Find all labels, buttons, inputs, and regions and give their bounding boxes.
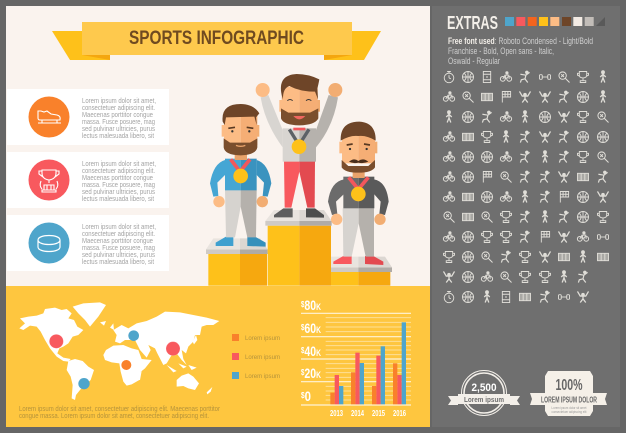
- chart axis labels: 40: [304, 343, 316, 359]
- chart axis labels: 2016: [393, 409, 406, 418]
- font credits: Franchise - Bold, Open sans - Italic,: [448, 46, 554, 57]
- chart axis labels: 80: [304, 297, 316, 313]
- text block: lectus malesuada libero, sit: [82, 194, 154, 203]
- panel: extras sidebar: [432, 6, 620, 427]
- athlete: centre in red: [256, 74, 342, 218]
- chart axis labels: K: [316, 348, 321, 358]
- text block: consectetuer adipiscing elit.: [82, 229, 155, 238]
- extras heading: EXTRAS: [447, 13, 498, 33]
- chart axis labels: 20: [304, 365, 316, 381]
- chart axis labels: $: [301, 346, 305, 355]
- illustration: podium and athletes: [206, 74, 392, 286]
- text block: massa. Fusce posuere, mag: [82, 117, 155, 126]
- colour swatches: [505, 17, 605, 26]
- chart axis labels: 2015: [372, 409, 385, 418]
- bars: [330, 322, 406, 404]
- chart legend: Lorem ipsum: [245, 354, 280, 361]
- title: SPORTS INFOGRAPHIC: [129, 28, 304, 49]
- grid lines: [301, 313, 411, 405]
- badge: 100%: [530, 371, 607, 416]
- panel: main cream poster: [6, 6, 430, 427]
- chart axis labels: K: [316, 302, 321, 312]
- chart axis labels: $: [301, 300, 305, 309]
- chart axis labels: $: [301, 323, 305, 332]
- world map: [19, 302, 219, 400]
- map markers: [49, 330, 180, 389]
- text block: massa. Fusce posuere, mag: [82, 180, 155, 189]
- chart axis labels: [301, 297, 406, 418]
- chart axis labels: $: [301, 368, 305, 377]
- icon: hockey puck: [28, 222, 70, 264]
- chart axis labels: $: [301, 391, 305, 400]
- badge: 2,500: 2,500: [472, 382, 496, 394]
- text block: lectus malesuada libero, sit: [82, 131, 154, 140]
- badge: 100%: 100%: [556, 377, 582, 394]
- panel: card 1 shoe: [7, 89, 169, 145]
- icon grid: sports icons: [443, 71, 609, 303]
- chart axis labels: 0: [305, 388, 311, 404]
- text block: massa. Fusce posuere, mag: [82, 243, 155, 252]
- icon: shoe: [28, 96, 70, 138]
- chart axis labels: 2013: [330, 409, 343, 418]
- text block: consectetuer adipiscing elit.: [82, 166, 155, 175]
- text block: sed pulvinar ultricies, purus: [82, 124, 155, 133]
- text block: lectus malesuada libero, sit: [82, 257, 154, 266]
- map caption: Lorem ipsum dolor sit amet, consectetuer adipiscing elit. Maecenas porttitor: [19, 406, 221, 413]
- athlete: right in grey: [328, 122, 389, 265]
- panel: yellow lower section: [6, 286, 430, 427]
- text block: consectetuer adipiscing elit.: [82, 103, 155, 112]
- text block: [82, 222, 156, 266]
- title ribbon: [52, 22, 381, 60]
- podium: [206, 210, 392, 286]
- badge: 2,500: Lorem ipsum: [464, 397, 504, 404]
- chart legend: [232, 334, 280, 380]
- text block: Maecenas porttitor congue: [82, 110, 153, 119]
- panel: card 3 puck: [7, 215, 169, 271]
- text block: Maecenas porttitor congue: [82, 173, 153, 182]
- continents: [19, 302, 219, 400]
- chart legend: Lorem ipsum: [245, 373, 280, 380]
- font credits: Oswald - Regular: [448, 56, 500, 67]
- text block: sed pulvinar ultricies, purus: [82, 250, 155, 259]
- badge: 100%: LOREM IPSUM DOLOR: [541, 396, 597, 404]
- icon: trophy: [28, 160, 70, 200]
- badge: 100%: Lorem ipsum dolor sit amet: [552, 406, 587, 410]
- chart axis labels: K: [316, 370, 321, 380]
- bar chart: [301, 313, 411, 405]
- panel: card 2 trophy: [7, 152, 169, 208]
- text block: Lorem ipsum dolor sit amet,: [82, 96, 156, 105]
- chart axis labels: 2014: [351, 409, 364, 418]
- text block: [82, 96, 156, 140]
- badge: 2,500: [448, 370, 520, 416]
- text block: Lorem ipsum dolor sit amet,: [82, 222, 156, 231]
- map caption: congue massa. Lorem ipsum dolor sit amet, consectetuer adipiscing elit.: [19, 413, 209, 420]
- text block: Lorem ipsum dolor sit amet,: [82, 159, 156, 168]
- text block: Maecenas porttitor congue: [82, 236, 153, 245]
- map caption: [19, 406, 221, 420]
- font credits: [448, 36, 593, 67]
- text block: sed pulvinar ultricies, purus: [82, 187, 155, 196]
- text block: [82, 159, 156, 203]
- chart legend: Lorem ipsum: [245, 335, 280, 342]
- chart axis labels: 60: [304, 320, 316, 336]
- chart axis labels: K: [316, 325, 321, 335]
- athlete: left in blue: [210, 104, 271, 247]
- badge: 100%: consectetuer adipiscing elit: [552, 410, 587, 414]
